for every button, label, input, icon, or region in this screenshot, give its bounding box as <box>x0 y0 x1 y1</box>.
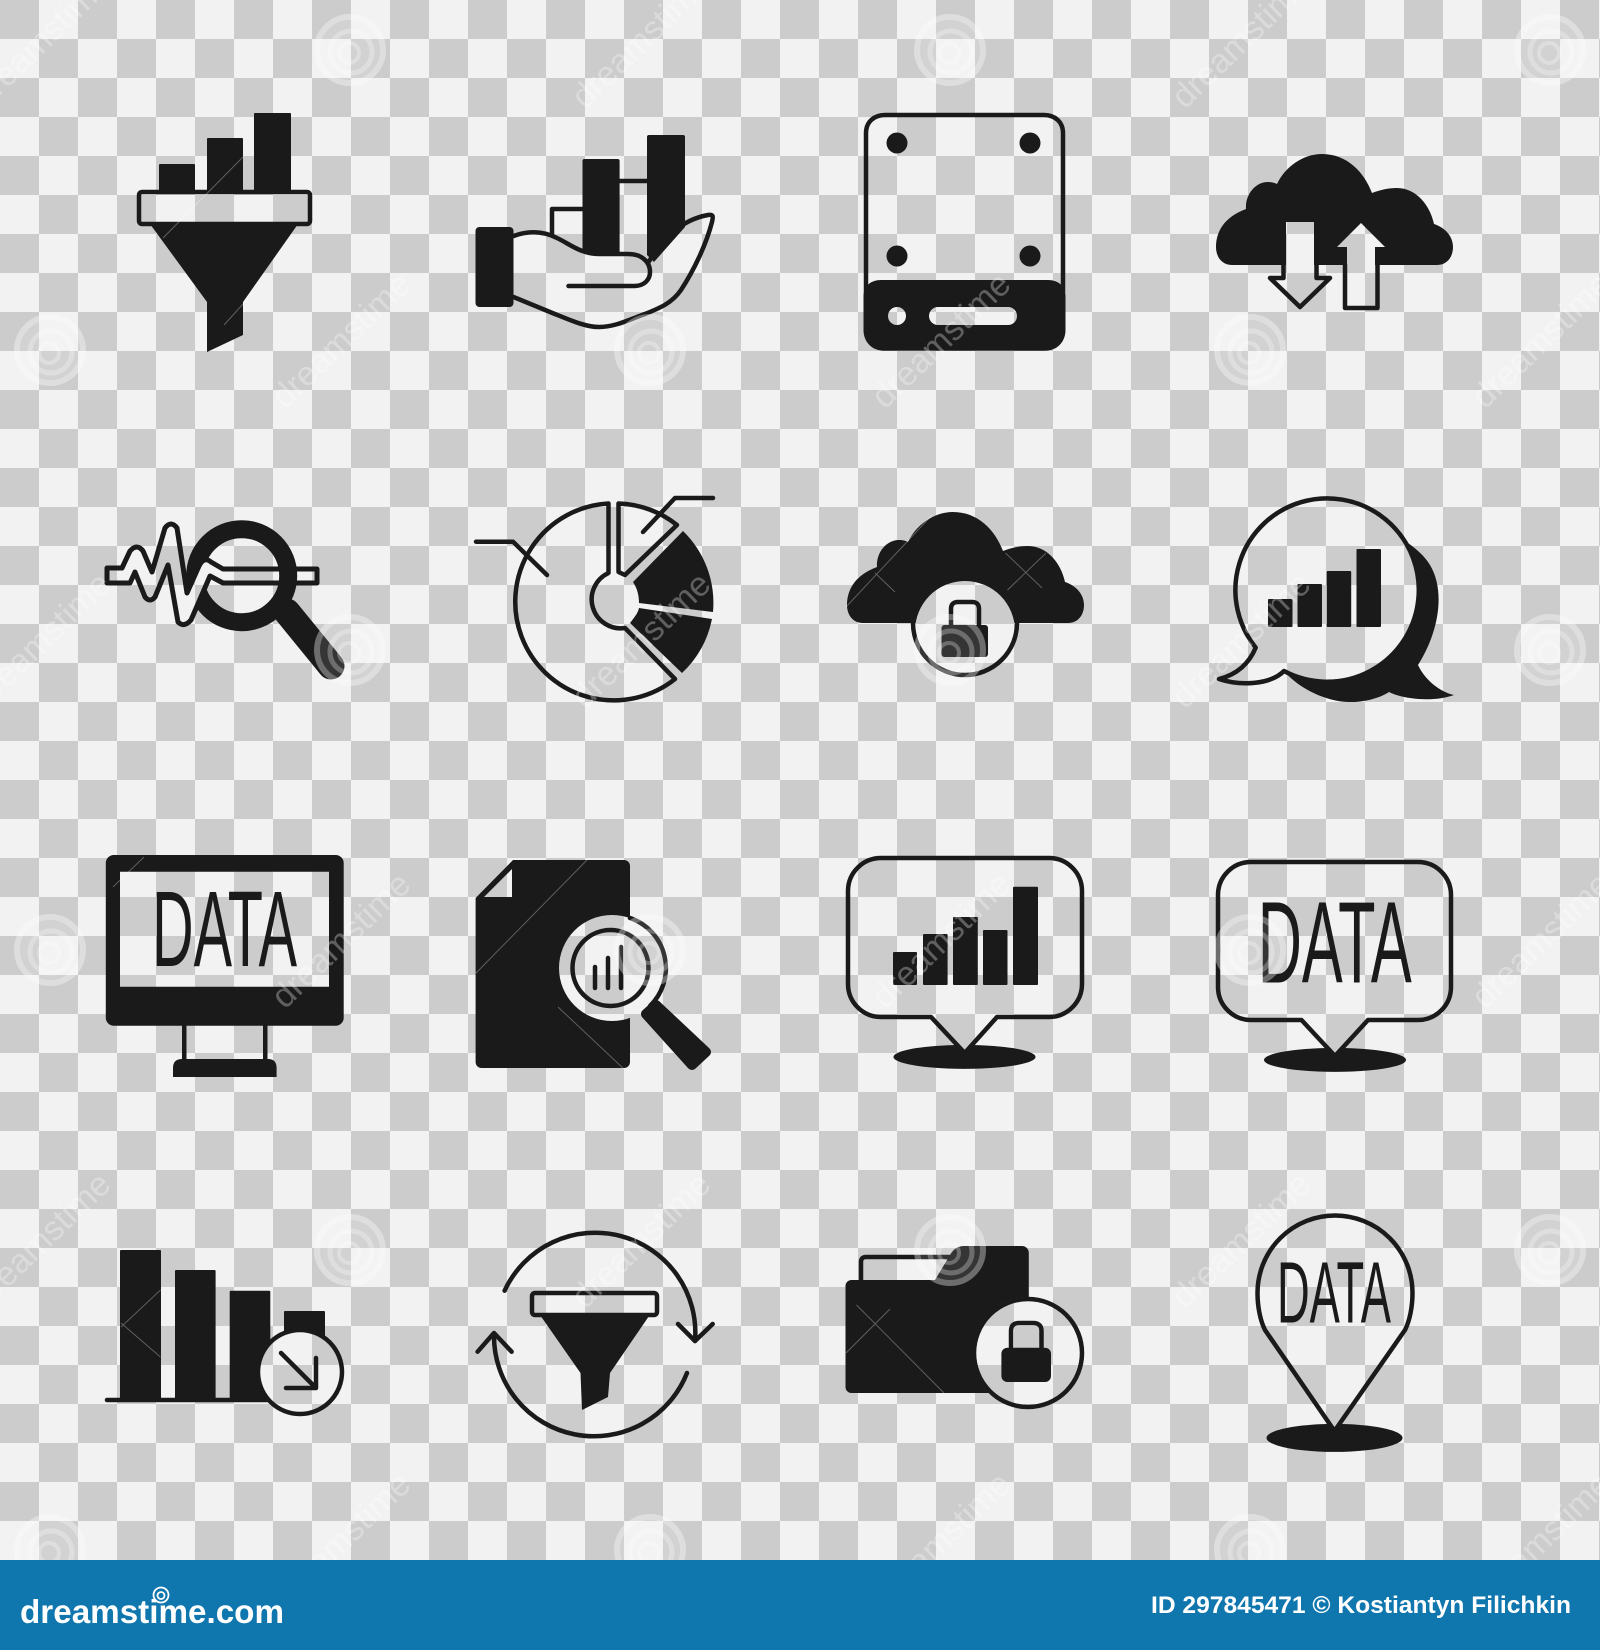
icon: funnel with refresh arrows <box>478 1233 713 1436</box>
label: DATA in pin: DATA <box>1277 1245 1391 1342</box>
icon: monitor showing DATA <box>106 855 344 1077</box>
icon: falling bars with stopwatch <box>107 1250 342 1414</box>
icon: cloud upload and download <box>1216 154 1453 308</box>
watermark overlay: dreamstime <box>564 565 718 716</box>
icon: map pin with DATA <box>1258 1216 1412 1452</box>
label: DATA in bubble: DATA <box>1258 878 1412 1008</box>
watermark overlay: dreamstime <box>864 1465 1018 1616</box>
icon: document with magnifier <box>476 860 706 1068</box>
icon: segmented pie chart <box>476 498 713 700</box>
watermark overlay: dreamstime <box>264 265 418 416</box>
icon: location bubble with DATA <box>1218 862 1451 1072</box>
watermark overlay: dreamstime <box>1164 565 1318 716</box>
icon: magnifier over waveform <box>107 524 331 666</box>
icon: hard drive <box>864 115 1066 351</box>
watermark overlay: dreamstime <box>264 1465 418 1616</box>
icon: hand holding bar chart <box>476 135 713 327</box>
watermark overlay: dreamstime <box>864 865 1018 1016</box>
watermark overlay: dreamstime <box>864 265 1018 416</box>
icon: logo swirl <box>154 1588 168 1602</box>
logo wordmark: dreamstime.com <box>20 1593 284 1630</box>
footer banner <box>0 1560 1600 1650</box>
label: DATA on monitor: DATA <box>152 868 297 989</box>
icon: folder with padlock <box>846 1246 1082 1407</box>
image ID and credit: ID 297845471 © Kostiantyn Filichkin <box>1151 1592 1571 1619</box>
icon: cloud with padlock <box>847 512 1084 675</box>
watermark overlay: dreamstime <box>1164 1165 1318 1316</box>
watermark overlay: dreamstime <box>264 865 418 1016</box>
icon: location bubble with bar chart <box>848 858 1082 1069</box>
icon: funnel with bar chart <box>139 113 310 352</box>
watermark overlay: dreamstime <box>564 1165 718 1316</box>
icon: speech bubbles with bar chart <box>1219 498 1454 702</box>
